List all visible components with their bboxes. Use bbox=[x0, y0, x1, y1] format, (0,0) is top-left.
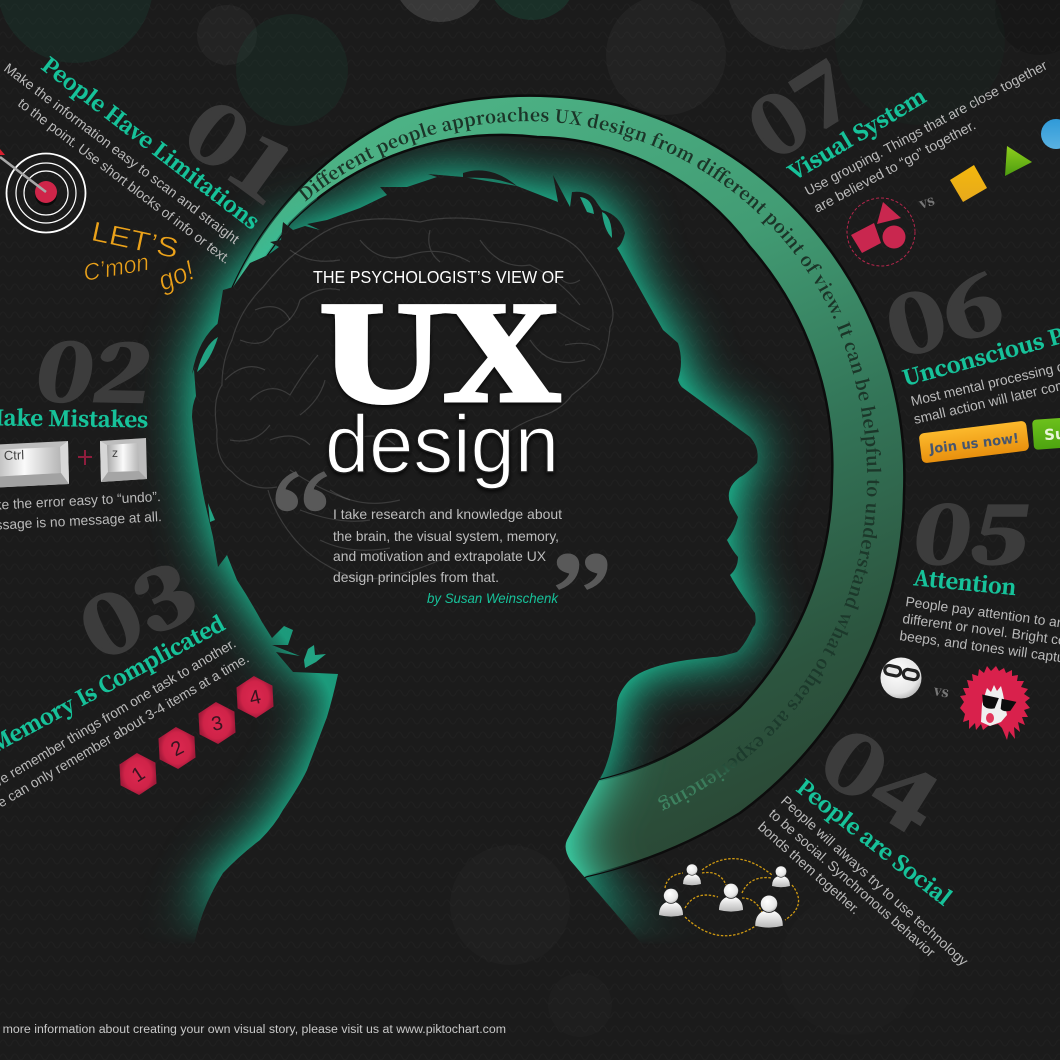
number 04: 04 bbox=[802, 695, 965, 856]
panel: 07 visual system bbox=[723, 28, 1060, 266]
quote text bbox=[333, 506, 562, 585]
panel: 01 people have limitations bbox=[0, 50, 323, 297]
title block bbox=[313, 256, 564, 490]
icon: hexagons bbox=[119, 675, 274, 796]
icon: ctrl key: Ctrl bbox=[4, 447, 24, 463]
icon: yellow square bbox=[950, 165, 987, 202]
handwritten note bbox=[81, 216, 199, 297]
handwritten note: LET’S bbox=[89, 216, 181, 264]
person bbox=[683, 864, 701, 885]
panel: 05 attention bbox=[880, 472, 1060, 740]
icon: red haired face bbox=[960, 666, 1030, 740]
button: join us now bbox=[919, 421, 1029, 463]
icon: plus bbox=[78, 450, 92, 465]
vs label: vs bbox=[931, 680, 951, 703]
title design: design bbox=[325, 399, 559, 490]
text 02 bbox=[0, 489, 162, 535]
vs label: vs bbox=[915, 190, 937, 214]
hair wisps bbox=[192, 170, 612, 668]
number 07: 07 bbox=[723, 28, 873, 181]
button: join us now: Join us now! bbox=[928, 431, 1020, 458]
panel: 02 make mistakes bbox=[0, 309, 162, 535]
quote author: by Susan Weinschenk bbox=[427, 591, 559, 606]
person bbox=[772, 866, 790, 887]
text 01: to the point. Use short blocks of info or text. bbox=[15, 95, 233, 267]
icon: plain face bbox=[880, 658, 922, 698]
heading 05: Attention bbox=[912, 562, 1018, 602]
number 02: 02 bbox=[28, 309, 162, 426]
text 04: bonds them together. bbox=[755, 819, 863, 917]
handwritten note: C’mon bbox=[81, 249, 151, 287]
ring end highlights bbox=[233, 174, 654, 877]
icon: green triangle bbox=[1005, 146, 1032, 176]
person bbox=[755, 895, 783, 928]
icon: ctrl key bbox=[0, 441, 69, 488]
text 04: to be social. Synchronous behavior bbox=[766, 806, 938, 960]
text 05 bbox=[899, 594, 1060, 675]
icon: hexagons: 3 bbox=[209, 712, 225, 736]
bokeh circles top bbox=[0, 0, 1060, 126]
panel: 06 unconscious processing bbox=[871, 238, 1060, 463]
icon: z key bbox=[100, 438, 147, 482]
person bbox=[719, 884, 743, 912]
title kicker: THE PSYCHOLOGIST’S VIEW OF bbox=[313, 267, 564, 287]
opening quote mark: “ bbox=[215, 442, 335, 604]
person bbox=[659, 889, 683, 917]
number 01: 01 bbox=[164, 68, 323, 226]
button: submit bbox=[1032, 415, 1060, 450]
text 07: are believed to “go” together. bbox=[811, 117, 978, 216]
text 07: Use grouping. Things that are close together bbox=[802, 58, 1050, 199]
icon: social network bbox=[659, 859, 799, 936]
heading 07: Visual System bbox=[782, 81, 931, 187]
number 06: 06 bbox=[871, 238, 1014, 380]
icon: hexagons: 1 bbox=[128, 763, 149, 787]
icon: hexagons: 4 bbox=[247, 686, 263, 710]
closing quote mark: ” bbox=[548, 527, 668, 673]
quote text: design principles from that. bbox=[333, 569, 499, 585]
icon: grouped shapes bbox=[847, 198, 915, 266]
number 05: 05 bbox=[906, 472, 1038, 587]
text 04: People will always try to use technology bbox=[778, 793, 971, 969]
icon: blue circle bbox=[1041, 119, 1060, 149]
panel: 04 people are social bbox=[659, 695, 971, 969]
handwritten note: go! bbox=[154, 254, 199, 297]
quote text: the brain, the visual system, memory, bbox=[333, 528, 559, 544]
title UX: UX bbox=[319, 256, 560, 436]
heading 01: People Have Limitations bbox=[36, 50, 266, 236]
ring text: Different people approaches UX design from different point of view. It can be helpful to understand what others are experiencing bbox=[298, 106, 882, 811]
head glow bbox=[180, 174, 758, 1000]
quote text: and motivation and extrapolate UX bbox=[333, 548, 547, 564]
heading 04: People are Social bbox=[791, 772, 958, 912]
brain outline bbox=[215, 218, 613, 580]
icon: hexagons: 2 bbox=[167, 737, 188, 761]
bokeh circles bottom bbox=[450, 845, 920, 1037]
number 03: 03 bbox=[58, 528, 212, 683]
panel: 03 memory is complicated bbox=[0, 528, 274, 817]
quote block bbox=[215, 442, 668, 673]
text 01: Make the information easy to scan and straight bbox=[1, 60, 242, 247]
quote text: I take research and knowledge about bbox=[333, 506, 562, 522]
icon: z key: z bbox=[112, 446, 118, 460]
icon: target bbox=[0, 149, 86, 232]
head silhouette bbox=[180, 174, 758, 1000]
